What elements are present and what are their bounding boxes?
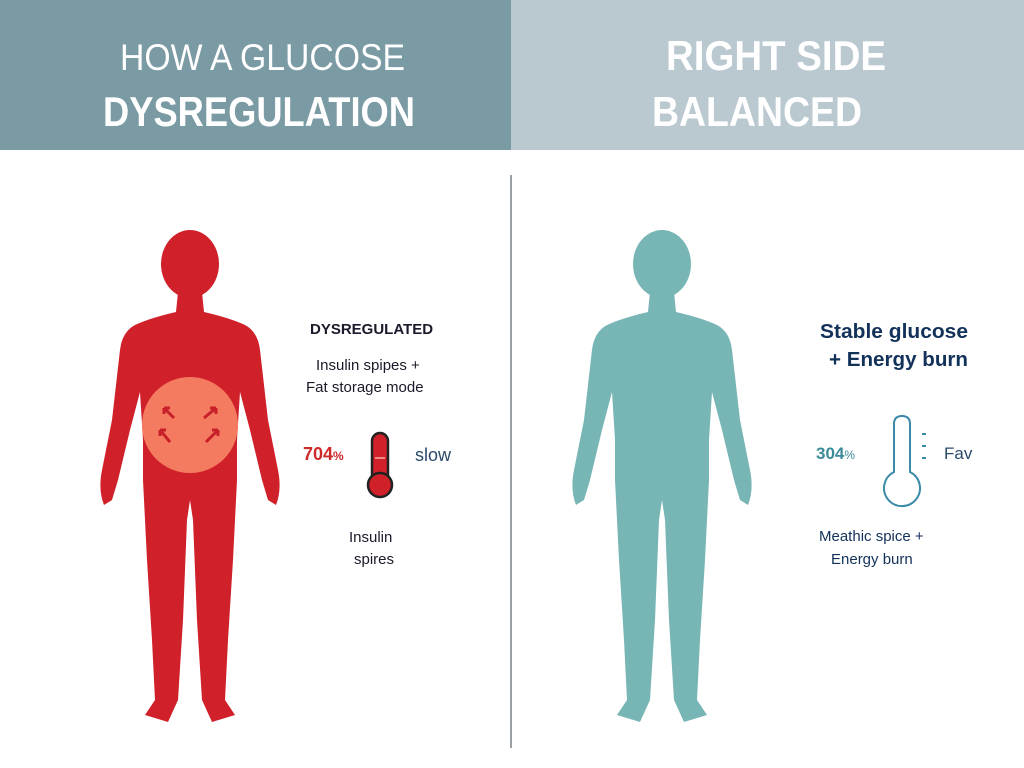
text: dysregulated label: DYSREGULATED	[310, 321, 433, 338]
header: right panel: BALANCED	[652, 88, 862, 135]
text: insulin spires: spires	[354, 551, 394, 568]
text: insulin spikes	[306, 357, 424, 396]
stat: 704%: 704%	[303, 444, 344, 464]
text: meathic spice: Energy burn	[831, 551, 913, 568]
header: left panel	[0, 0, 511, 150]
text: stable glucose: + Energy burn	[829, 349, 968, 371]
icon: outline thermometer	[884, 416, 926, 506]
figure: teal balanced body	[572, 230, 752, 722]
text: stable glucose	[820, 321, 968, 371]
text: meathic spice	[819, 528, 924, 568]
text: slow: slow	[415, 445, 452, 465]
text: insulin spikes: Fat storage mode	[306, 379, 424, 396]
stat: 304%: 304%	[816, 444, 855, 463]
text: Fav: Fav	[944, 444, 973, 463]
text: insulin spikes: Insulin spipes +	[316, 357, 420, 374]
header: right panel	[511, 0, 1024, 150]
icon: red thermometer	[368, 433, 392, 497]
header: left panel: HOW A GLUCOSE	[120, 37, 405, 78]
text: stable glucose: Stable glucose	[820, 321, 968, 343]
text: meathic spice: Meathic spice +	[819, 528, 924, 545]
text: insulin spires: Insulin	[349, 529, 392, 546]
divider line	[510, 175, 512, 748]
text: insulin spires	[349, 529, 394, 568]
header: left panel: DYSREGULATION	[103, 88, 415, 135]
abdomen glow with arrows	[142, 377, 238, 473]
header: right panel: RIGHT SIDE	[666, 32, 886, 79]
figure: red dysregulated body	[100, 230, 280, 722]
